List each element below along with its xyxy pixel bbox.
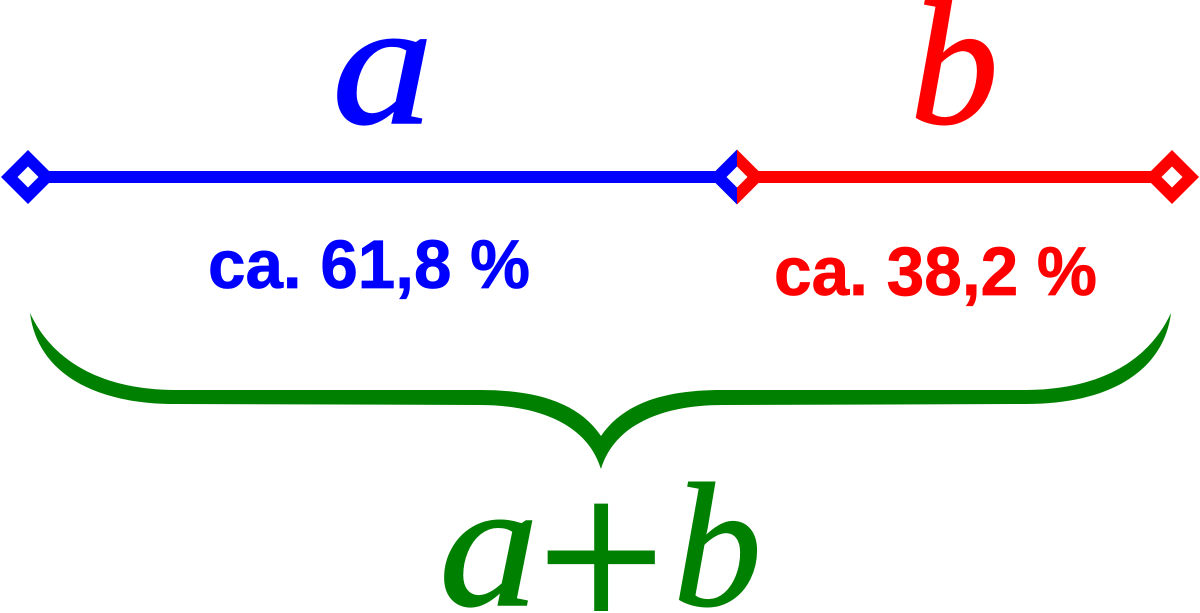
segment b: red line with end diamonds	[737, 150, 1199, 204]
segment a: blue line with end diamonds	[1, 150, 737, 204]
curly brace	[30, 313, 1171, 469]
percentage b: ca. 38,2 %	[774, 233, 1097, 310]
label: a+b	[439, 470, 762, 613]
percentage a: ca. 61,8 %	[208, 226, 530, 303]
